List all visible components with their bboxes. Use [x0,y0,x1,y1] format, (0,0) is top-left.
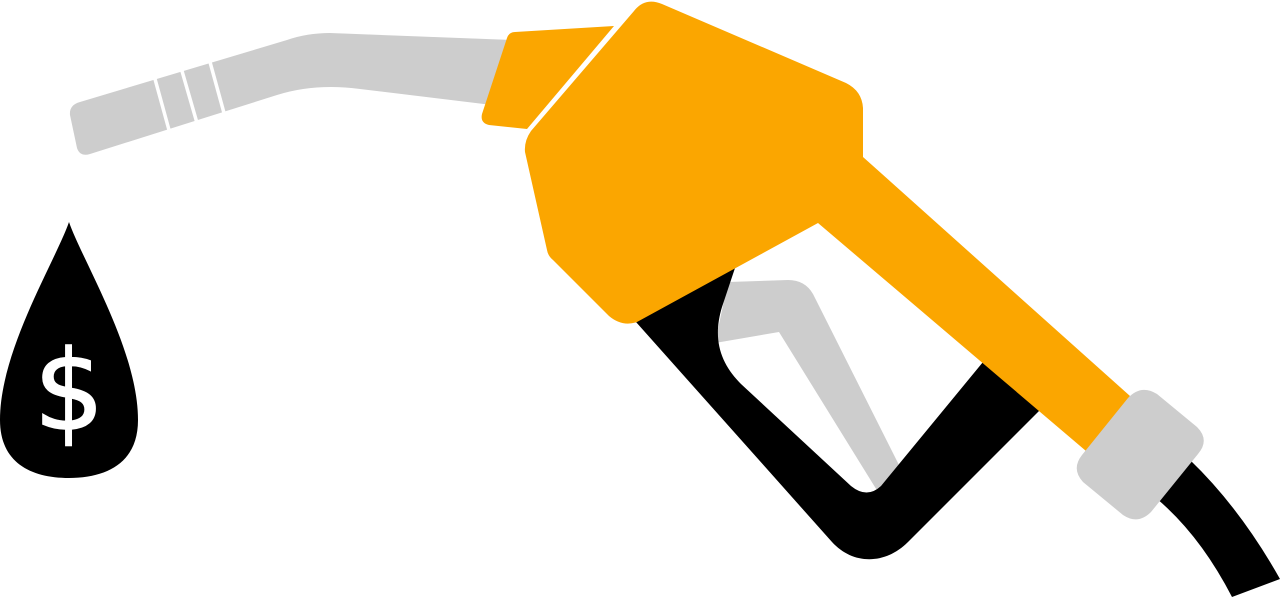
trigger guard [636,268,1040,559]
dollar sign: $ [34,327,104,456]
nozzle spout [70,33,512,155]
pump body and handle [525,2,1130,451]
nozzle collar [482,26,614,129]
trigger lever [715,280,900,492]
hose grip [1077,390,1204,519]
hose [1156,460,1280,597]
fuel drop with dollar sign [0,222,138,478]
